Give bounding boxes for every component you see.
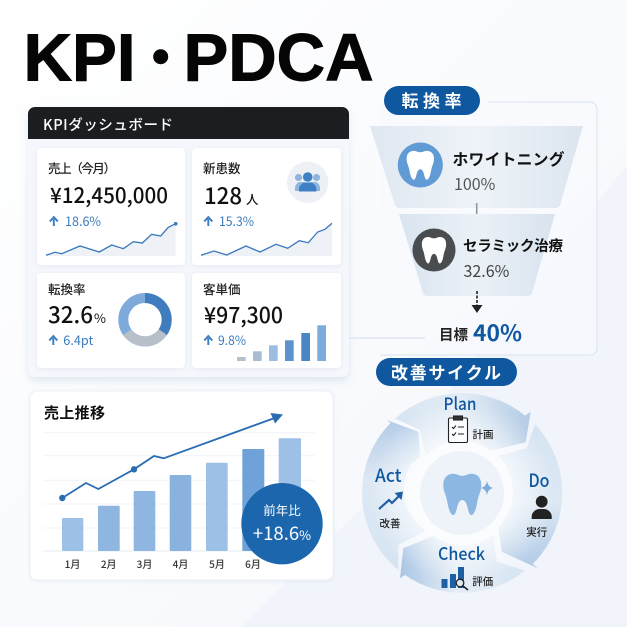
icon: person [532, 496, 552, 519]
target value: 目標 [439, 324, 468, 345]
card: conversion rate [37, 273, 185, 368]
card: conversion rate: 6.4pt [63, 330, 94, 349]
heading: conversion [384, 86, 480, 115]
month labels: 4月 [173, 556, 188, 571]
panel: conversion funnel [349, 86, 597, 355]
card: average spend: 9.8% [218, 330, 246, 349]
title: PDCA [184, 20, 374, 96]
card: new patients [192, 148, 341, 265]
card: conversion rate: % [94, 308, 106, 327]
title [24, 20, 374, 96]
card: new patients: 128 [204, 179, 242, 211]
step: act: 改善 [380, 516, 400, 531]
step: plan: 計画 [472, 427, 494, 442]
card: average spend [192, 273, 341, 368]
month labels: 5月 [209, 556, 225, 571]
card: new patients: 新患数 [203, 158, 241, 177]
month labels [65, 556, 261, 571]
step: act: Act [375, 462, 402, 488]
step: do: Do [528, 467, 550, 493]
card: conversion rate: 転換率 [48, 279, 86, 298]
card: sales: 18.6% [65, 211, 101, 230]
target value: 40% [473, 316, 522, 348]
bar chart: monthly sales [62, 438, 301, 551]
panel: sales trend [30, 391, 333, 580]
bar chart: average spend [237, 325, 326, 361]
card: conversion rate: 32.6 [48, 298, 93, 330]
callout: year over year: +18.6% [253, 520, 311, 546]
step: act [375, 462, 403, 531]
month labels: 2月 [101, 556, 117, 571]
step: check: Check [438, 541, 485, 566]
step: plan [444, 390, 494, 442]
dashboard header [28, 107, 349, 139]
month labels: 6月 [245, 556, 261, 571]
icon: clipboard [448, 416, 468, 442]
line chart: trend arrow [59, 413, 283, 501]
icon: patients [287, 162, 328, 203]
icon: bars and magnifier [442, 567, 468, 590]
title: KPI [24, 20, 136, 96]
panel: improvement cycle [362, 358, 562, 593]
step: do [526, 467, 552, 540]
step: check [438, 541, 493, 590]
card: new patients: 人 [246, 189, 259, 208]
card: sales [37, 148, 185, 265]
donut chart [123, 298, 167, 341]
icon: rising arrow [379, 492, 403, 509]
step: check: 評価 [472, 574, 493, 589]
target value [439, 316, 522, 348]
dashboard header: KPIダッシュボード [43, 114, 173, 135]
heading: improvement cycle: 改善サイクル [391, 359, 501, 384]
month labels: 3月 [137, 556, 152, 571]
funnel step: ceramic: 32.6% [464, 258, 510, 282]
card: sales: 売上（今月） [48, 158, 116, 177]
heading: sales trend: 売上推移 [44, 402, 105, 423]
funnel step: ceramic [399, 214, 564, 296]
step: do: 実行 [526, 524, 548, 540]
cycle center [412, 443, 512, 543]
funnel step: whitening: ホワイトニング [452, 147, 565, 170]
month labels: 1月 [65, 556, 80, 571]
step: plan: Plan [444, 390, 476, 415]
panel: KPI dashboard [28, 107, 349, 377]
cycle arrows [362, 393, 562, 593]
callout: year over year [241, 483, 323, 564]
card: average spend: 客単価 [203, 279, 241, 298]
funnel step: whitening [370, 126, 583, 208]
card: new patients: 15.3% [219, 211, 254, 230]
heading: improvement cycle [376, 358, 517, 386]
card: sales: ¥12,450,000 [50, 180, 168, 210]
arrow: to target [472, 291, 482, 313]
heading: conversion: 転換率 [402, 87, 462, 112]
funnel step: whitening: 100% [454, 171, 496, 195]
card: average spend: ¥97,300 [204, 298, 283, 330]
arrow: funnel step [472, 203, 482, 224]
funnel step: ceramic: セラミック治療 [463, 235, 564, 256]
callout: year over year: 前年比 [263, 500, 301, 519]
